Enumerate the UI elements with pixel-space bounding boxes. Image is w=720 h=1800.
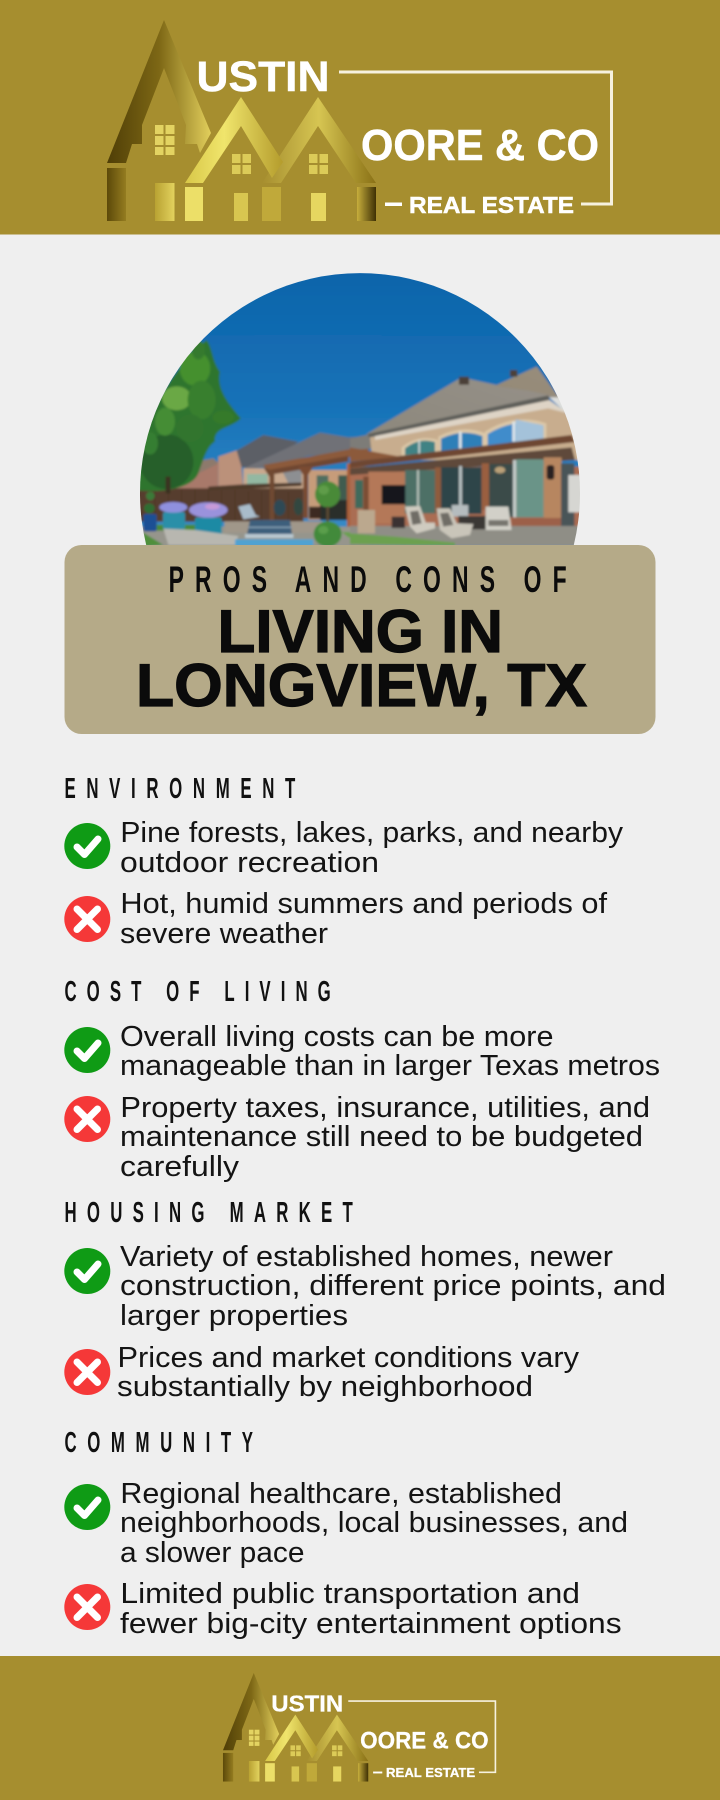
con item bbox=[64, 1578, 622, 1640]
section heading: ENVIRONMENT bbox=[64, 774, 296, 805]
photo right: main brick house bbox=[350, 367, 602, 546]
photo tree bbox=[135, 340, 241, 493]
pro text: construction, different price points, and bbox=[120, 1270, 666, 1302]
logo frame line bbox=[339, 72, 612, 204]
section: cost of living bbox=[64, 977, 660, 1183]
hero photo: backyard patio and pool of a brick home bbox=[140, 273, 580, 545]
con text: severe weather bbox=[120, 918, 328, 950]
pro text: larger properties bbox=[120, 1300, 348, 1332]
pro text: Overall living costs can be more bbox=[120, 1021, 554, 1053]
title line 2: LONGVIEW, TX bbox=[136, 652, 587, 719]
con item bbox=[64, 888, 608, 950]
pro item bbox=[64, 1241, 666, 1332]
section: environment bbox=[64, 774, 624, 950]
section heading: HOUSING MARKET bbox=[64, 1198, 353, 1229]
pro text: neighborhoods, local businesses, and bbox=[120, 1507, 628, 1539]
logo text: Moore & Co: OORE & CO bbox=[361, 121, 599, 170]
icon: green check bbox=[64, 1248, 110, 1294]
pro item bbox=[64, 1021, 660, 1082]
con text: Limited public transportation and bbox=[120, 1578, 580, 1610]
title panel bbox=[64, 545, 656, 734]
photo left: yard, pergola, neighbouring houses bbox=[135, 433, 368, 547]
logo dash bbox=[373, 1772, 382, 1773]
pro text: Regional healthcare, established bbox=[120, 1478, 562, 1510]
logo text: Real Estate: REAL ESTATE bbox=[386, 1766, 475, 1780]
logo text: Moore & Co: OORE & CO bbox=[360, 1728, 489, 1755]
logo text: Real Estate: REAL ESTATE bbox=[409, 192, 574, 218]
con text: substantially by neighborhood bbox=[117, 1371, 533, 1403]
icon: red cross bbox=[64, 1349, 110, 1395]
footer band bbox=[0, 1656, 720, 1800]
con text: fewer big-city entertainment options bbox=[120, 1608, 622, 1640]
logo dash bbox=[385, 202, 402, 206]
pro text: Variety of established homes, newer bbox=[120, 1241, 613, 1273]
icon: red cross bbox=[64, 896, 110, 942]
logo houses bbox=[223, 1673, 368, 1782]
pro text: a slower pace bbox=[120, 1537, 304, 1569]
pro text: manageable than in larger Texas metros bbox=[120, 1050, 660, 1082]
con text: Prices and market conditions vary bbox=[118, 1342, 580, 1374]
icon: red cross bbox=[64, 1096, 110, 1142]
icon: red cross bbox=[64, 1584, 110, 1630]
con item bbox=[64, 1092, 650, 1183]
footer logo bbox=[223, 1673, 495, 1782]
section: housing market bbox=[64, 1198, 666, 1403]
pro item bbox=[64, 817, 624, 879]
section heading: COMMUNITY bbox=[64, 1428, 253, 1459]
logo houses bbox=[107, 20, 376, 221]
title line 1: LIVING IN bbox=[218, 598, 503, 665]
header band bbox=[0, 0, 720, 234]
pro item bbox=[64, 1478, 628, 1569]
icon: green check bbox=[64, 1027, 110, 1073]
logo frame line bbox=[348, 1701, 495, 1772]
con text: maintenance still need to be budgeted bbox=[120, 1121, 643, 1153]
con text: Property taxes, insurance, utilities, and bbox=[120, 1092, 650, 1124]
con item bbox=[64, 1342, 580, 1403]
header logo bbox=[107, 20, 612, 221]
pro text: Pine forests, lakes, parks, and nearby bbox=[120, 817, 624, 849]
pro text: outdoor recreation bbox=[120, 847, 379, 879]
title kicker: PROS AND CONS OF bbox=[169, 558, 567, 600]
logo text: Austin: USTIN bbox=[196, 53, 330, 101]
section heading: COST OF LIVING bbox=[64, 977, 331, 1008]
icon: green check bbox=[64, 1484, 110, 1530]
section: community bbox=[64, 1428, 628, 1640]
con text: Hot, humid summers and periods of bbox=[120, 888, 608, 920]
con text: carefully bbox=[120, 1151, 240, 1183]
icon: green check bbox=[64, 823, 110, 869]
logo text: Austin: USTIN bbox=[271, 1690, 343, 1716]
